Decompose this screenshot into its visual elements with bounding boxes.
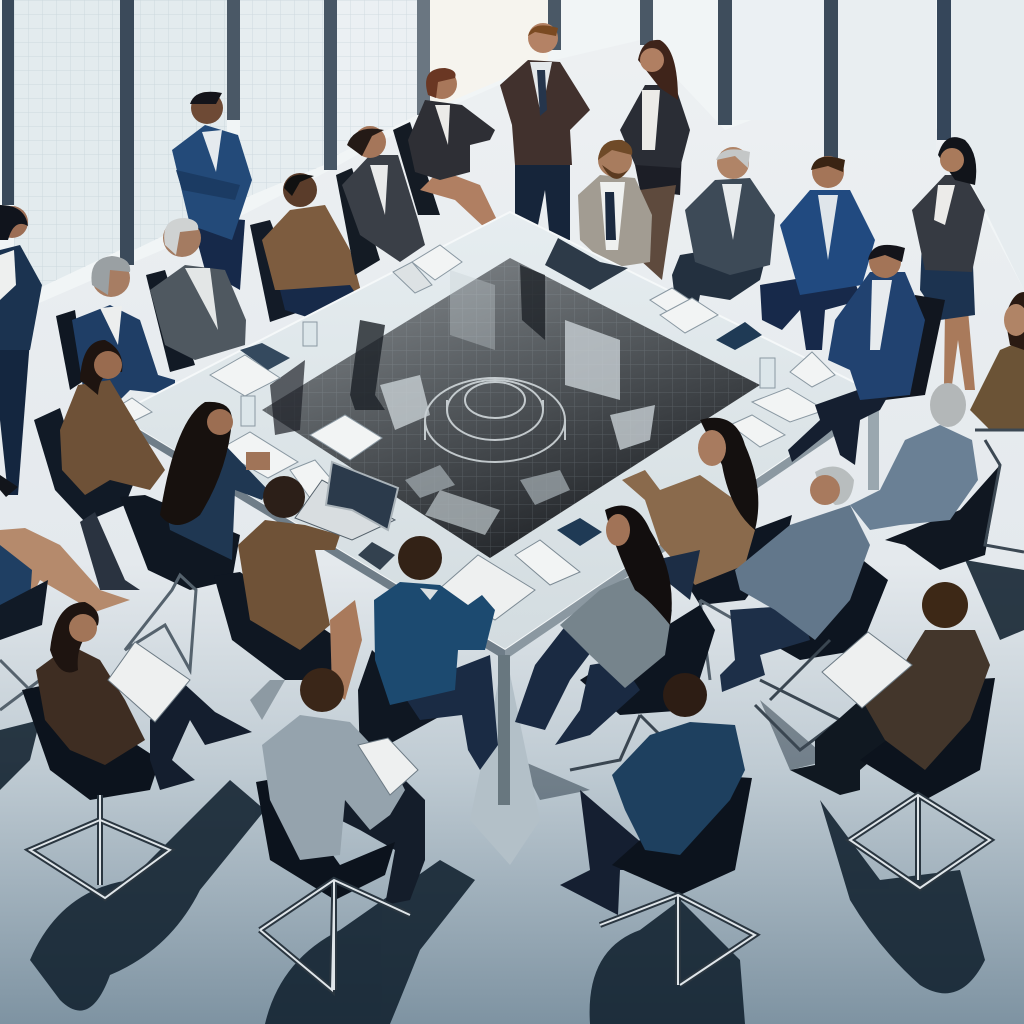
- person: woman long hair navy: [120, 402, 270, 670]
- person: grey hair man in grey suit: [146, 218, 246, 372]
- papers and phones on front table edge: [358, 518, 602, 620]
- laptop back: [545, 238, 628, 290]
- person: standing woman right: [912, 137, 985, 390]
- person: man tan jacket with laptop: [214, 462, 398, 720]
- floor shadows: [0, 560, 1024, 1024]
- person: bearded man: [578, 140, 676, 280]
- table: [112, 212, 880, 805]
- person: grey hair man in slate jacket: [720, 467, 888, 750]
- person: grey hair woman in blue jacket: [56, 256, 175, 410]
- person: standing woman: [620, 40, 690, 195]
- person: far right woman: [970, 292, 1024, 430]
- papers on table: [112, 245, 835, 498]
- person: cut off woman left: [0, 528, 130, 710]
- person: woman long hair grey sweater: [515, 506, 715, 770]
- center seam: [470, 650, 540, 865]
- person: man blue suit at corner: [788, 245, 945, 465]
- person: man tan sweater: [250, 173, 362, 322]
- person: standing man brown suit: [500, 23, 590, 240]
- person: standing man blue suit: [172, 92, 252, 290]
- person: man brown jacket with book: [790, 582, 995, 888]
- windows: [0, 0, 1024, 320]
- person: woman in brown with book: [22, 602, 252, 898]
- reflected legs: [350, 320, 385, 410]
- person: man blue suit sitting: [760, 156, 875, 350]
- person: man blue sweater with notes: [358, 536, 498, 770]
- person: grey hair woman right: [850, 383, 1024, 570]
- person: grey hair man sitting right: [672, 147, 775, 305]
- person: man light shirt with book: [256, 668, 425, 990]
- person: woman gesturing: [393, 68, 497, 228]
- person: brown jacket woman at left corner: [34, 340, 165, 590]
- glass inset with city model: [262, 258, 760, 558]
- person: man navy jacket from behind: [560, 673, 755, 985]
- person: seated woman dark blazer: [336, 126, 425, 275]
- person: woman long hair tan sweater: [622, 418, 792, 680]
- person: standing woman far left: [0, 205, 42, 497]
